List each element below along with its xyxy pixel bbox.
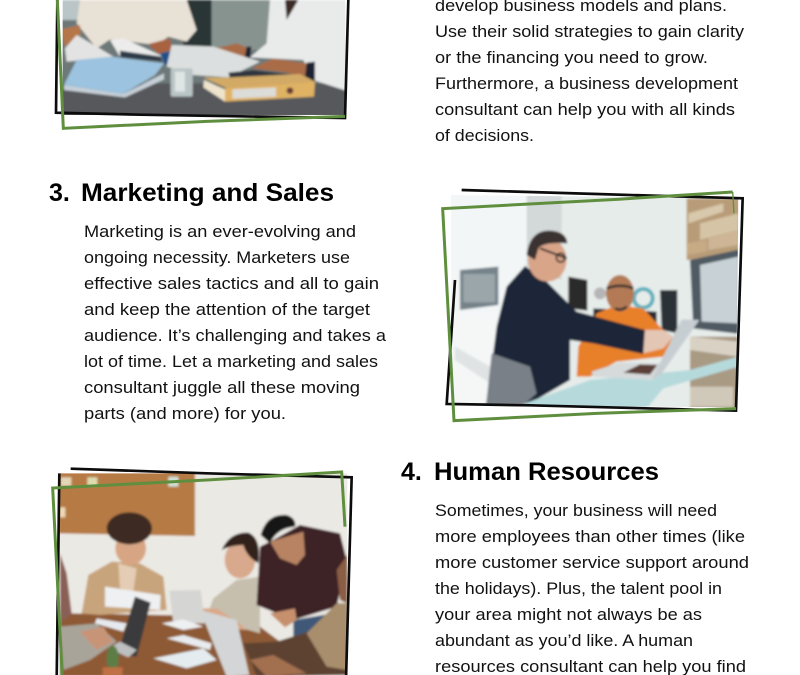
text block: marketing and sales paragraph: ongoing necessity. Marketers use — [84, 248, 350, 267]
text block: marketing and sales paragraph: Marketing is an ever-evolving and — [84, 222, 356, 241]
text block: marketing and sales paragraph: audience. It’s challenging and takes a — [84, 326, 387, 345]
text block: human resources paragraph: Sometimes, your business will need — [435, 501, 717, 520]
text block: business development paragraph: or the financing you need to grow. — [435, 48, 708, 67]
text block: marketing and sales paragraph: effective sales tactics and all to gain — [84, 274, 379, 293]
photo: team meeting around a table with laptops — [53, 469, 352, 675]
text block: human resources paragraph: more customer service support around — [435, 553, 749, 572]
heading: 3. Marketing and Sales: 3. — [49, 179, 70, 207]
heading: 4. Human Resources: Human Resources — [434, 458, 659, 486]
text block: marketing and sales paragraph — [84, 222, 387, 423]
heading: 4. Human Resources: 4. — [401, 458, 422, 486]
text block: human resources paragraph: abundant as you’d like. A human — [435, 631, 693, 650]
text block: marketing and sales paragraph: lot of time. Let a marketing and sales — [84, 352, 378, 371]
text block: business development paragraph: of decisions. — [435, 126, 534, 145]
text block: business development paragraph: Furthermore, a business development — [435, 74, 738, 93]
text block: human resources paragraph: the holidays). Plus, the talent pool in — [435, 579, 722, 598]
text block: human resources paragraph: your area might not always be as — [435, 605, 702, 624]
text block: marketing and sales paragraph: and keep the attention of the target — [84, 300, 370, 319]
text block: business development paragraph — [435, 0, 745, 145]
text block: human resources paragraph: more employees than other times (like — [435, 527, 745, 546]
heading: 3. Marketing and Sales: Marketing and Sales — [81, 179, 334, 207]
photo: two men talking over a laptop — [443, 190, 743, 421]
text block: business development paragraph: Use their solid strategies to gain clarity — [435, 22, 745, 41]
text block: marketing and sales paragraph: parts (and more) for you. — [84, 404, 286, 423]
text block: marketing and sales paragraph: consultant juggle all these moving — [84, 378, 360, 397]
text block: human resources paragraph — [435, 501, 749, 675]
photo: colleagues reviewing documents and folders at a table — [56, 0, 350, 128]
text block: business development paragraph: consultant can help you with all kinds — [435, 100, 735, 119]
